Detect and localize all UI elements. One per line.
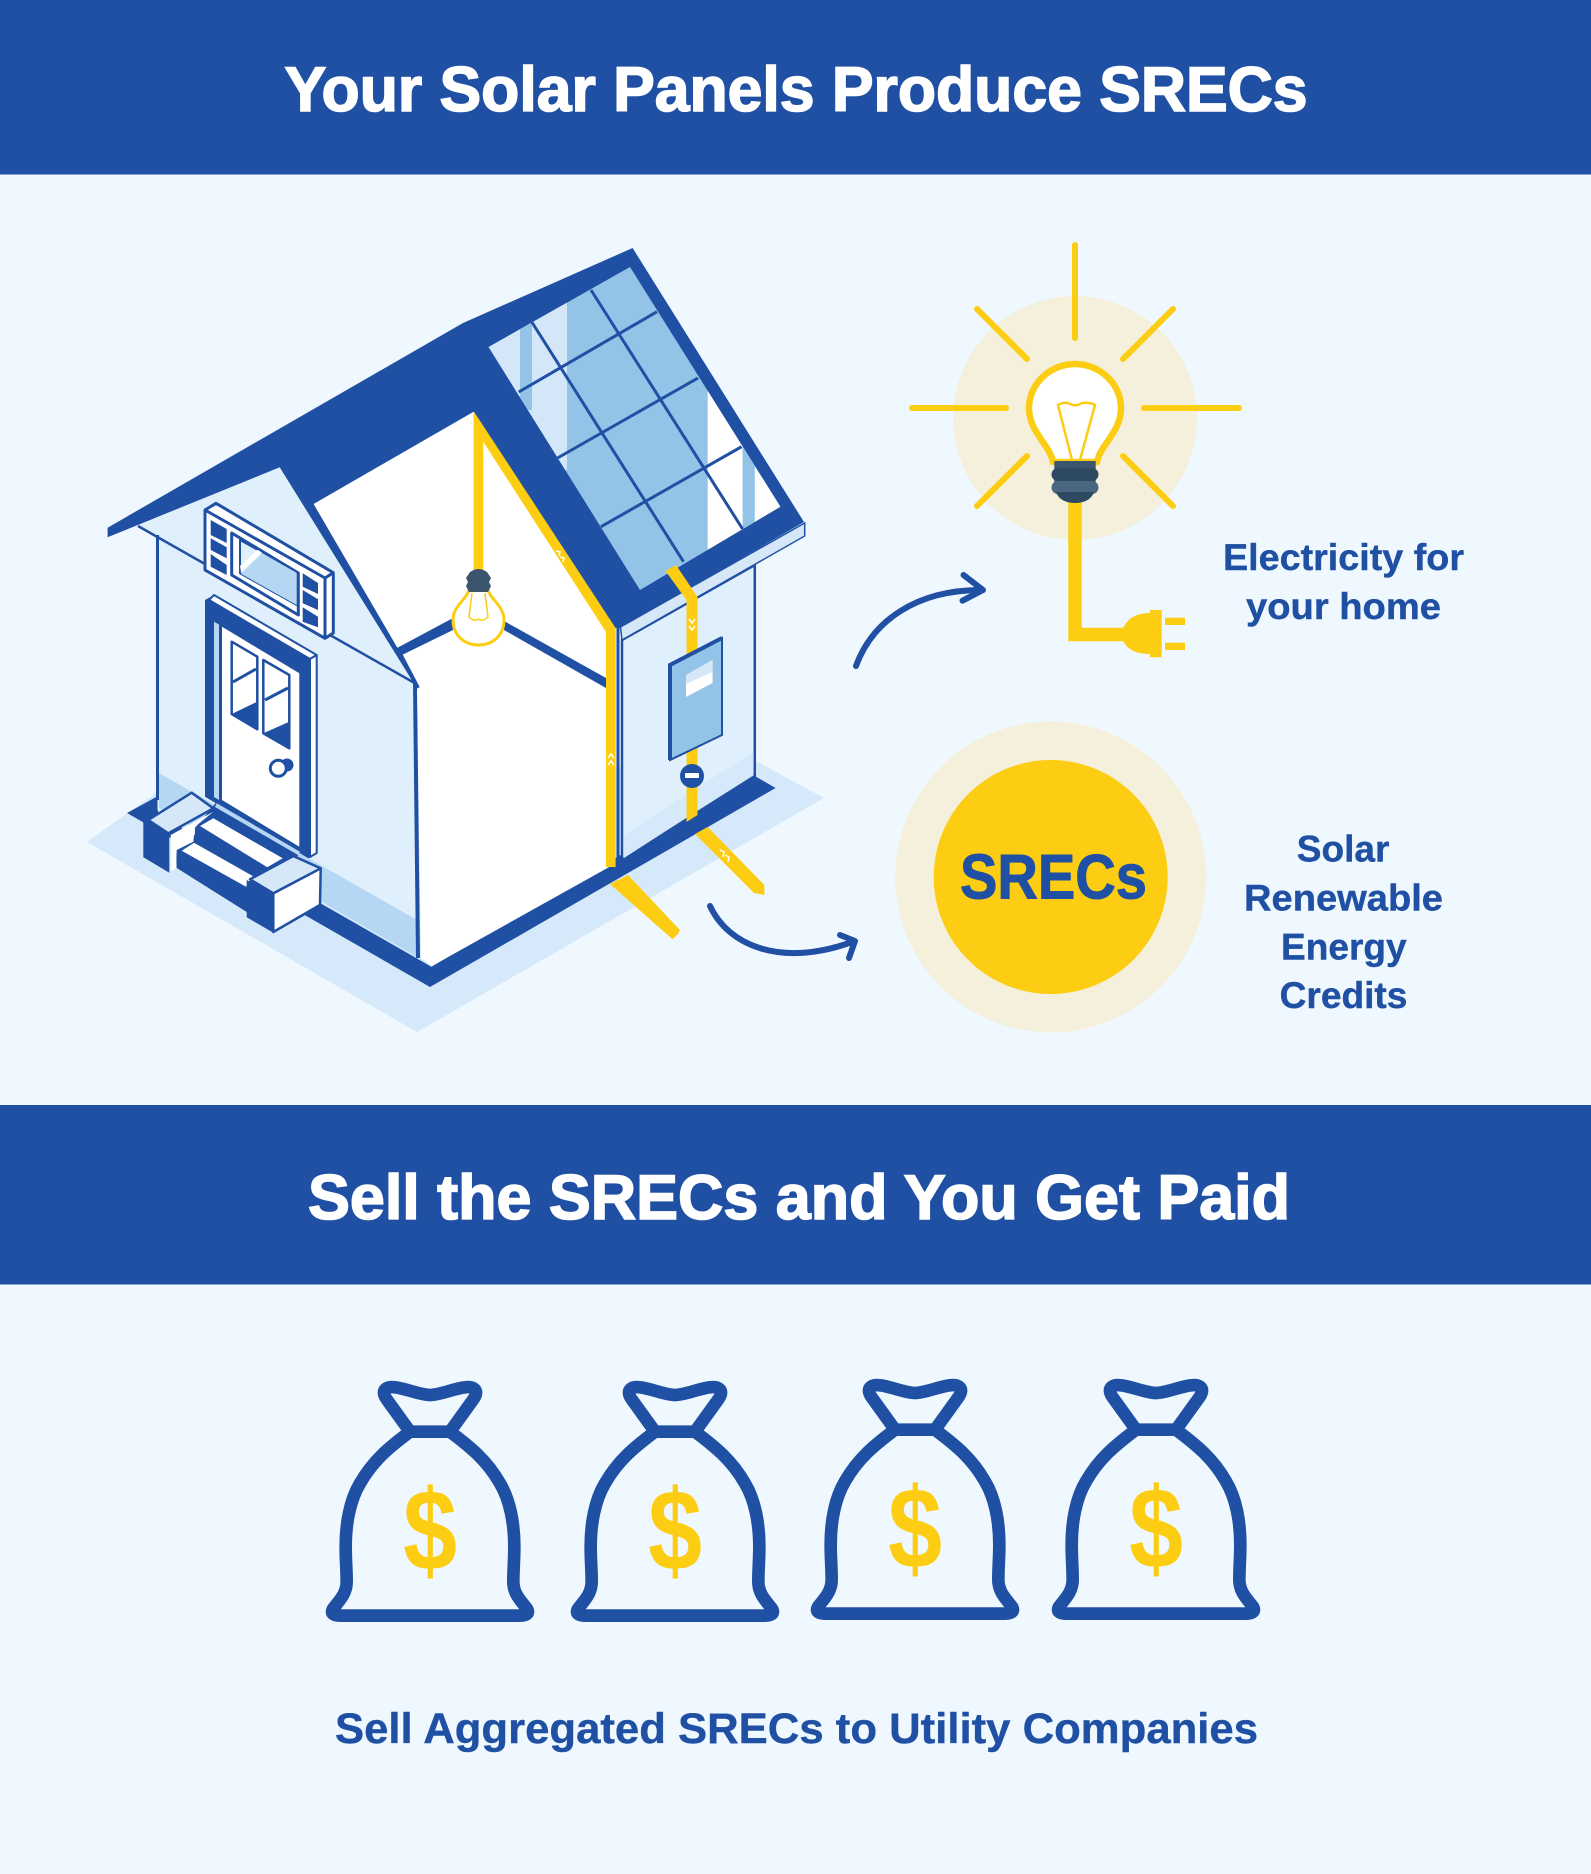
SRECs badge bbox=[895, 722, 1206, 1032]
cutaway white interior bbox=[314, 412, 611, 966]
electric meter bbox=[670, 638, 722, 760]
house illustration bbox=[87, 248, 824, 1032]
power cord bbox=[1075, 500, 1125, 634]
label: electricity for your home: your home bbox=[1246, 586, 1441, 627]
title: Sell the SRECs and You Get Paid: Sell the SRECs and You Get Paid bbox=[308, 1163, 1290, 1233]
filament bbox=[1058, 403, 1095, 460]
icon: money bag 1 bbox=[332, 1387, 528, 1616]
caption: sell aggregated SRECs: Sell Aggregated SRECs to Utility Companies bbox=[335, 1705, 1258, 1753]
title: Your Solar Panels Produce SRECs: Your Solar Panels Produce SRECs bbox=[284, 55, 1308, 125]
label: solar renewable energy credits: Renewable bbox=[1244, 878, 1443, 918]
hanging light bulb bbox=[453, 569, 504, 645]
left step block bbox=[143, 793, 213, 873]
underground wires bbox=[610, 827, 764, 939]
arrow: house to SRECs bbox=[710, 906, 855, 958]
icon: glowing light bulb with plug bbox=[912, 245, 1239, 657]
roof bbox=[108, 248, 804, 690]
label: solar renewable energy credits: Solar bbox=[1297, 828, 1389, 870]
flow chevrons on wires bbox=[556, 551, 729, 862]
right side wall bbox=[622, 565, 755, 860]
plug bbox=[1123, 610, 1185, 657]
blue edge beside wiring bbox=[616, 628, 620, 862]
foundation base bbox=[127, 776, 776, 987]
interior beams bbox=[397, 618, 606, 688]
icon: money bag 3: $ bbox=[888, 1463, 942, 1593]
banner: second heading bbox=[0, 1105, 1591, 1284]
front gable wall bbox=[139, 467, 417, 957]
roof fascia bbox=[620, 523, 805, 640]
attic window bbox=[205, 503, 333, 638]
icon: money bag 3 bbox=[817, 1385, 1013, 1614]
label: solar renewable energy credits: Credits bbox=[1280, 975, 1407, 1016]
yellow wiring inside house bbox=[474, 412, 698, 867]
bulb glow bbox=[953, 296, 1197, 540]
bulb socket bbox=[1052, 461, 1098, 503]
front door bbox=[205, 595, 317, 858]
door knob bbox=[270, 758, 294, 776]
meter dial bbox=[680, 764, 704, 788]
icon: money bag 4 bbox=[1058, 1385, 1254, 1614]
right step block bbox=[247, 856, 321, 933]
label: electricity for your home: Electricity for bbox=[1223, 537, 1464, 578]
label: solar renewable energy credits bbox=[1244, 828, 1443, 1016]
icon: money bag 1: $ bbox=[403, 1465, 457, 1595]
door window left bbox=[232, 642, 257, 729]
front steps bbox=[143, 793, 321, 933]
wall outlines bbox=[138, 526, 418, 958]
bulb glass bbox=[1029, 364, 1121, 462]
banner: top heading bbox=[0, 0, 1591, 174]
light rays bbox=[912, 245, 1239, 506]
door window right bbox=[263, 660, 289, 748]
ground shadow bbox=[87, 760, 824, 1032]
icon: money bag 2 bbox=[577, 1387, 773, 1616]
label: electricity for your home bbox=[1223, 537, 1464, 627]
wall ground shade bbox=[159, 773, 417, 957]
label: solar renewable energy credits: Energy bbox=[1281, 926, 1407, 968]
icon: money bag 2: $ bbox=[648, 1465, 702, 1595]
arrow: house to electricity bbox=[856, 575, 983, 666]
right wall lower shade bbox=[624, 752, 753, 858]
icon: money bag 4: $ bbox=[1129, 1463, 1183, 1593]
solar panel bbox=[488, 267, 780, 590]
SRECs badge: SRECs bbox=[960, 842, 1147, 912]
